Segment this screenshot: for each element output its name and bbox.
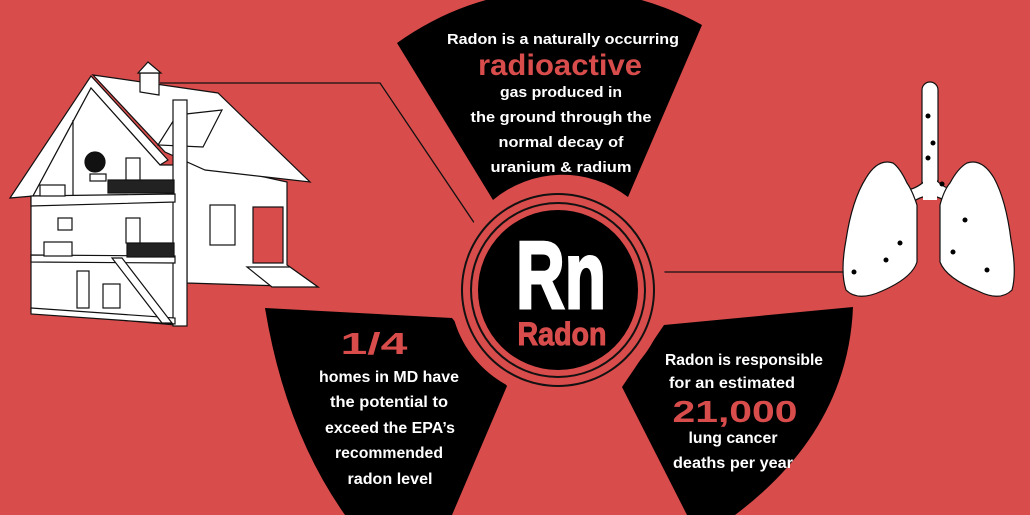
right wing xyxy=(187,160,318,287)
text block: 1/4 homes: 1/4 xyxy=(340,326,409,361)
text block: top: uranium & radium xyxy=(490,159,632,176)
text block: top: gas produced in xyxy=(500,84,622,101)
main roof xyxy=(93,75,310,182)
text block: top: normal decay of xyxy=(498,134,625,151)
left section body xyxy=(31,196,175,325)
text block: top: the ground through the xyxy=(470,109,652,126)
text block: 1/4 homes: recommended xyxy=(335,445,443,462)
icon: house cutaway xyxy=(10,62,318,326)
text block: top: radioactive xyxy=(478,49,642,82)
blade: bottom-left xyxy=(265,308,507,515)
text block: 21,000 deaths: Radon is responsible xyxy=(665,352,823,369)
steps xyxy=(247,267,318,287)
dormer xyxy=(158,110,222,147)
text block: 1/4 homes: homes in MD have xyxy=(319,369,459,386)
balconies xyxy=(108,180,174,193)
connector line: center to lungs xyxy=(655,271,853,273)
text block: top: Radon is a naturally occurring xyxy=(447,31,679,48)
name Radon: Radon xyxy=(518,316,606,352)
blade: top xyxy=(397,0,702,200)
chimney xyxy=(140,73,159,95)
text block: 21,000 deaths: 21,000 xyxy=(672,394,798,429)
text block: 1/4 homes: the potential to xyxy=(330,394,448,411)
floors xyxy=(31,194,175,206)
text block: 1/4 homes: radon level xyxy=(348,471,432,488)
text block: 21,000 deaths: for an estimated xyxy=(669,375,795,392)
icon: lungs xyxy=(843,82,1014,296)
blade: bottom-right xyxy=(622,307,853,515)
text block: 1/4 homes: exceed the EPA’s xyxy=(325,420,455,437)
stairs xyxy=(112,258,172,323)
text block: 21,000 deaths: lung cancer xyxy=(688,430,778,447)
symbol Rn: Rn xyxy=(516,222,606,329)
text block: 21,000 deaths: deaths per year xyxy=(673,455,793,472)
text block: top xyxy=(447,31,679,176)
text block: 21,000 deaths xyxy=(665,352,823,472)
plant xyxy=(85,152,105,172)
gable xyxy=(10,76,168,198)
doors and windows xyxy=(126,158,140,180)
text block: 1/4 homes xyxy=(319,326,459,488)
connector line: house to center xyxy=(160,83,477,227)
center emblem xyxy=(450,182,666,398)
